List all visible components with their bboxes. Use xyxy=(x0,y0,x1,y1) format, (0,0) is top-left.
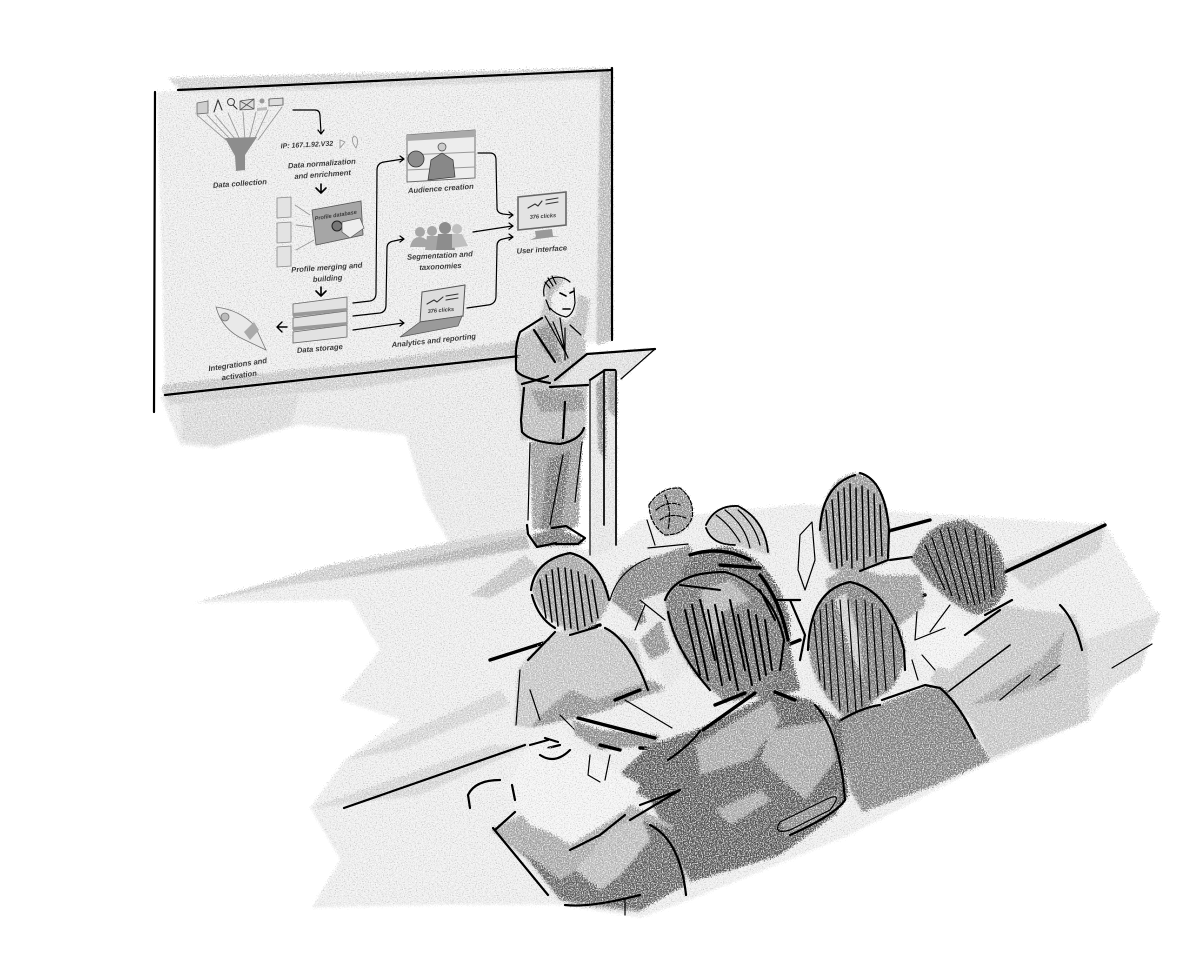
front shirt and forearm xyxy=(505,745,640,842)
screen surface xyxy=(157,68,612,393)
text: data storage: Data storage xyxy=(296,342,344,355)
front jacket highlights xyxy=(695,700,840,838)
arrows: storage to outputs xyxy=(353,156,404,330)
text: integrations: activation xyxy=(221,368,258,382)
bob shadow xyxy=(530,680,665,728)
front arm xyxy=(490,805,686,912)
audience member: curly hair xyxy=(610,488,700,625)
right body xyxy=(930,605,1088,758)
front body lines xyxy=(468,692,845,915)
curly lines xyxy=(610,488,692,600)
curly head xyxy=(649,488,692,535)
text: profile merging: Profile merging and xyxy=(291,261,363,274)
bob head xyxy=(532,553,609,632)
woman body xyxy=(838,687,990,812)
podium fills xyxy=(553,349,655,560)
text: user interface: User interface xyxy=(516,243,568,256)
long hair strokes xyxy=(798,473,912,590)
icon: data collection funnel xyxy=(197,98,283,171)
text: profile merging: building xyxy=(313,273,343,284)
right head xyxy=(911,520,1006,615)
panel: projection screen xyxy=(154,68,612,412)
woman hair highlights xyxy=(835,592,862,680)
presenter xyxy=(516,276,587,547)
presenter fills xyxy=(516,276,587,547)
icon: audience creation browser xyxy=(407,130,475,182)
table with notebook xyxy=(527,580,715,775)
arrows: outputs to interface xyxy=(467,153,513,308)
text: data collection: Data collection xyxy=(213,177,267,190)
front arm lighter fold xyxy=(575,815,650,890)
front arm shadow xyxy=(520,820,685,910)
wall shading below screen xyxy=(160,348,530,545)
arrow: to integrations xyxy=(277,322,287,332)
floor shading xyxy=(195,505,1160,918)
curly body xyxy=(610,545,700,625)
audience member: right with dark hair xyxy=(911,520,1088,758)
right body shadow xyxy=(970,630,1065,705)
presenter outline xyxy=(516,316,585,547)
presenter head xyxy=(544,276,575,317)
arrow: funnel to enrichment xyxy=(293,110,324,134)
text: data normalization: and enrichment xyxy=(294,168,352,181)
arrow: down to profile xyxy=(316,184,326,193)
audience member: long hair back row xyxy=(798,473,925,625)
icon: analytics laptop xyxy=(400,285,465,337)
icon: data storage servers xyxy=(293,297,347,343)
icon: location markers xyxy=(340,136,358,148)
icon: rocket xyxy=(216,307,266,350)
icon: analytics laptop: 376 clicks xyxy=(427,307,454,315)
front head strokes xyxy=(665,572,784,705)
icon: profile database: Profile database xyxy=(314,210,357,222)
text: data normalization: Data normalization xyxy=(288,157,356,170)
long hair body xyxy=(825,565,925,625)
text: analytics and reporting: Analytics and reporting xyxy=(390,332,477,350)
audience member: bun xyxy=(706,506,770,555)
front head xyxy=(665,572,785,702)
audience member: centre woman xyxy=(808,582,990,812)
icon: segmentation people xyxy=(410,222,468,250)
table fills xyxy=(527,580,715,775)
text: segmentation: taxonomies xyxy=(419,261,462,272)
icon: profile database xyxy=(277,197,364,267)
long hair head xyxy=(819,473,889,572)
screen frame xyxy=(154,68,612,412)
right lines xyxy=(912,528,1082,702)
right hands and notes xyxy=(915,608,985,670)
text: audience creation: Audience creation xyxy=(407,182,474,195)
woman hair xyxy=(808,582,905,725)
icon: user interface monitor xyxy=(518,192,566,240)
table lines xyxy=(545,600,690,750)
text: integrations: Integrations and xyxy=(208,356,268,373)
desk lines xyxy=(344,520,1152,808)
arrow: down to storage xyxy=(316,287,326,296)
bob lines xyxy=(516,553,648,730)
podium lines xyxy=(550,349,655,555)
podium xyxy=(550,349,655,560)
icon: user interface monitor: 376 clicks xyxy=(530,213,556,221)
front hair highlights xyxy=(700,580,750,650)
audience member: left row with bob hair xyxy=(514,553,665,730)
audience member: large front attendee xyxy=(468,572,848,915)
text: IP address: IP: 167.1.92.V32 xyxy=(281,141,333,150)
bob body xyxy=(514,628,665,728)
woman lines xyxy=(808,582,975,738)
front jacket xyxy=(612,692,848,882)
dark-haired person behind the front attendee xyxy=(680,547,805,700)
text: segmentation: Segmentation and xyxy=(407,249,473,262)
